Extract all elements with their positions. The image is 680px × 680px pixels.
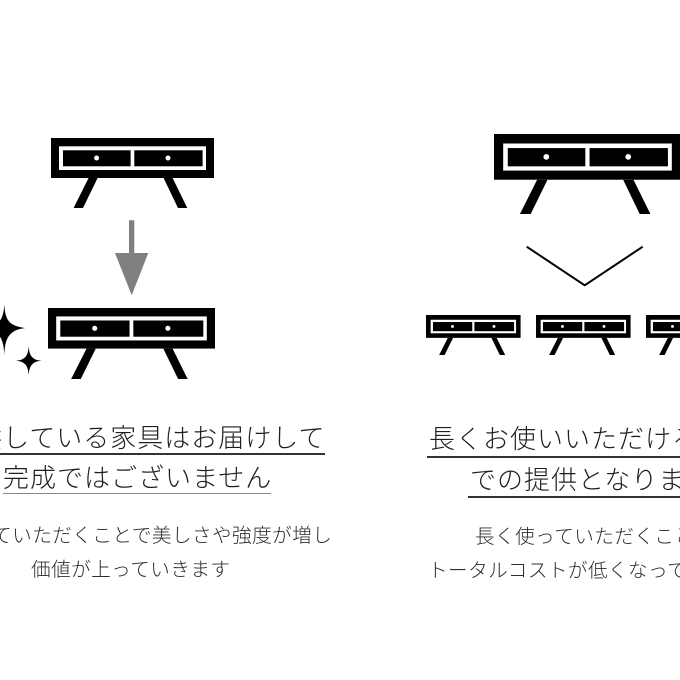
underline: right line 2 <box>468 496 680 498</box>
icon: TV board after <box>48 308 215 379</box>
icon: small TV board 1 <box>426 315 521 355</box>
icon: large TV board <box>494 134 680 214</box>
icon: TV board before <box>51 138 214 208</box>
body text: left line 2: 価値が上っていきます <box>31 559 230 581</box>
icon: small TV board 3 <box>646 315 680 355</box>
icon: small TV board 2 <box>536 315 631 355</box>
heading: left line 2: 完成ではございません <box>3 463 272 493</box>
underline: left line 1 <box>0 453 325 455</box>
underline: left line 2 <box>3 493 271 494</box>
underline: right line 1 <box>427 456 680 458</box>
